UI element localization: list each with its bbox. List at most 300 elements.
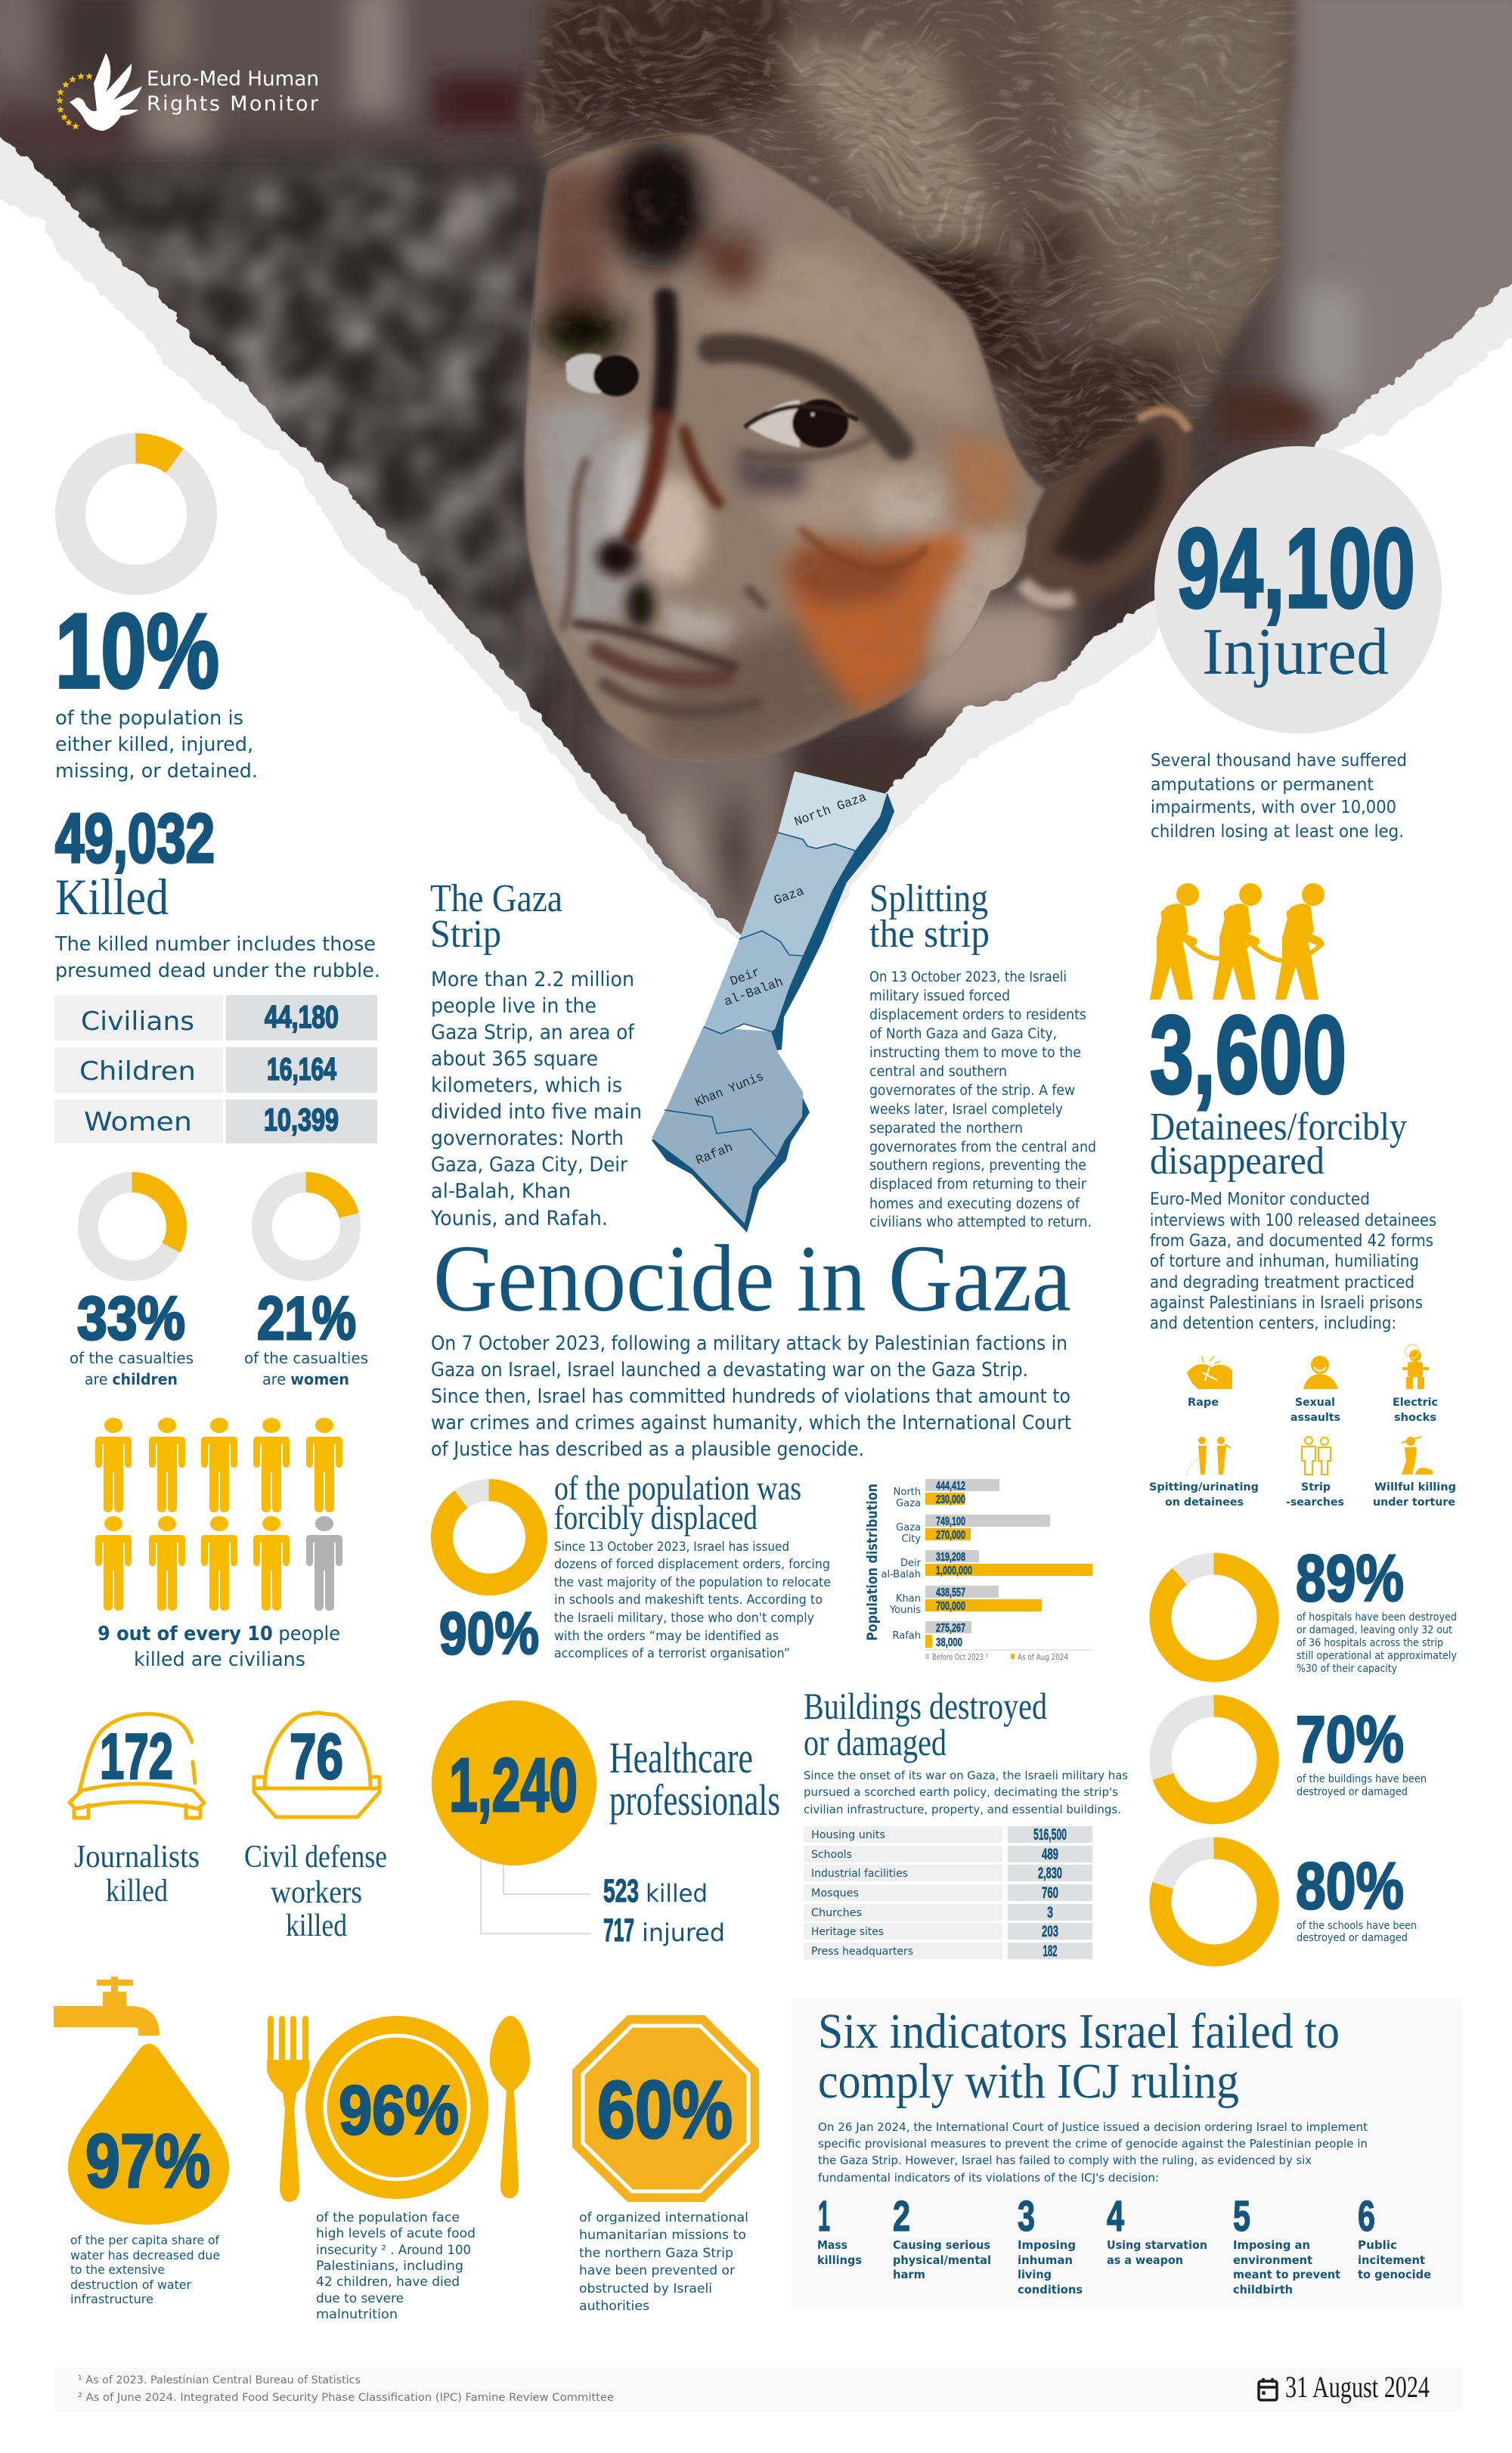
- bar values: 438,557: [936, 1586, 965, 1599]
- heading: [1150, 1106, 1407, 1183]
- body: the Israeli military, those who don't comply: [554, 1611, 814, 1625]
- indicator 4: Using starvation: [1107, 2238, 1207, 2252]
- text: population description: missing, or detained.: [55, 760, 258, 783]
- stat: 76: 76: [290, 1721, 343, 1793]
- icon: rape: [1187, 1357, 1232, 1389]
- body: displaced from returning to their: [869, 1177, 1086, 1192]
- text: missions: have been prevented or: [579, 2263, 735, 2278]
- icon: hard hat: [254, 1713, 380, 1817]
- heading: of the population was: [554, 1468, 801, 1507]
- text: food: of the population face: [316, 2210, 460, 2225]
- background photo: injured child: [0, 0, 1512, 954]
- indicator 3: inhuman: [1018, 2253, 1073, 2267]
- region: Gaza: [739, 833, 855, 956]
- text: journalists killed: killed: [106, 1874, 168, 1909]
- category labels: Younis: [889, 1605, 921, 1616]
- body: homes and executing dozens of: [869, 1196, 1080, 1212]
- indicator 6: incitement: [1358, 2253, 1426, 2267]
- icon: willful killing: [1402, 1437, 1433, 1475]
- text: hospitals: of 36 hospitals across the strip: [1297, 1637, 1443, 1649]
- heading: [554, 1468, 801, 1537]
- circle: 94,100 injured: [1154, 446, 1442, 733]
- text: journalists killed: Journalists: [74, 1840, 200, 1875]
- icon: strip searches: [1302, 1437, 1331, 1475]
- table: buildings: Mosques: [811, 1887, 859, 1899]
- logo text: Rights Monitor: [147, 92, 319, 116]
- stat: 172: 172: [100, 1721, 173, 1793]
- map shadow: [764, 793, 894, 1051]
- panel: healthcare professionals: [432, 1701, 780, 1949]
- text: missions: humanitarian missions to: [579, 2228, 746, 2243]
- bar values: 700,000: [936, 1600, 965, 1613]
- label: spitting/urinating: on detainees: [1165, 1496, 1244, 1509]
- body: interviews with 100 released detainees: [1150, 1211, 1436, 1230]
- text: pictogram caption: [98, 1623, 340, 1671]
- icon: chained detainees: [1150, 883, 1325, 1000]
- text: water: water has decreased due: [70, 2248, 220, 2262]
- heading: [804, 1685, 1047, 1763]
- table: buildings: 760: [1042, 1884, 1058, 1902]
- intro paragraph: Since then, Israel has committed hundreds of violations that amount to: [431, 1385, 1070, 1408]
- indicator 2: [893, 2192, 991, 2281]
- label: willful killing: [1373, 1481, 1456, 1509]
- text: journalists killed: [74, 1840, 200, 1909]
- indicator 5: environment: [1233, 2253, 1313, 2267]
- legend: As of Aug 2024: [1018, 1652, 1068, 1662]
- circle: 1,240: [432, 1701, 596, 1865]
- region: North Gaza: [778, 771, 887, 851]
- donut chart: 70%: [1160, 1706, 1268, 1813]
- category labels: Gaza: [896, 1498, 921, 1509]
- category labels: Rafah: [892, 1630, 921, 1642]
- icon: spitting and urinating: [1187, 1437, 1231, 1475]
- logo text: Euro-Med Human: [147, 67, 319, 91]
- indicator 4: as a weapon: [1107, 2253, 1183, 2267]
- text: hospitals: of hospitals have been destroyed: [1297, 1611, 1457, 1623]
- text: missions: of organized international: [579, 2210, 748, 2225]
- stat: 80%: 80%: [1296, 1850, 1404, 1923]
- body: about 365 square: [431, 1047, 598, 1071]
- body: governorates of the strip. A few: [869, 1083, 1075, 1099]
- body: On 13 October 2023, the Israeli: [869, 969, 1067, 985]
- icon: plate: [305, 2016, 488, 2199]
- label: sexual assaults: Sexual: [1295, 1397, 1335, 1409]
- label: strip searches: -searches: [1286, 1496, 1344, 1509]
- indicator 6: Public: [1358, 2238, 1397, 2252]
- body: accomplices of a terrorist organisation”: [554, 1646, 790, 1661]
- panel: six indicators: [792, 1999, 1462, 2307]
- heading: [430, 877, 562, 956]
- text: killed note: [54, 933, 380, 982]
- body: of torture and inhuman, humiliating: [1150, 1252, 1419, 1271]
- axis title: Population distribution: [864, 1484, 881, 1641]
- indicator 1: killings: [817, 2253, 862, 2267]
- indicator 6: [1358, 2192, 1431, 2281]
- ear: [1016, 408, 1193, 616]
- body: Since 13 October 2023, Israel has issued: [554, 1540, 789, 1554]
- body: [554, 1540, 831, 1661]
- table: killed breakdown: 44,180: [265, 999, 339, 1034]
- stat: 717 injured: injured: [642, 1918, 725, 1947]
- body: [818, 2120, 1368, 2185]
- body: Since the onset of its war on Gaza, the Israeli military has: [804, 1769, 1128, 1782]
- body: dozens of forced displacement orders, forcing: [554, 1557, 830, 1571]
- stat: 21%: 21%: [257, 1285, 356, 1353]
- heading: Splitting: [869, 877, 988, 920]
- heading: Healthcare: [609, 1733, 753, 1782]
- stat: 70%: 70%: [1296, 1703, 1404, 1776]
- text: civil defense: Civil defense: [244, 1840, 387, 1875]
- indicator 2: harm: [893, 2268, 925, 2281]
- indicator 5: meant to prevent: [1233, 2268, 1341, 2281]
- circle: 1,240: 1,240: [449, 1743, 578, 1828]
- body: On 26 Jan 2024, the International Court of Justice issued a decision ordering Israel to implement: [818, 2120, 1368, 2134]
- panel: forcibly displaced: [439, 1468, 831, 1667]
- body: governorates: North: [431, 1127, 624, 1150]
- indicator 5: Imposing an: [1233, 2238, 1310, 2252]
- label: electric shocks: shocks: [1394, 1412, 1436, 1424]
- table: killed breakdown: Women: [84, 1107, 192, 1137]
- label: electric shocks: [1393, 1397, 1438, 1424]
- panel: injured: [1151, 446, 1442, 842]
- region: Deir al-Balah: [704, 931, 803, 1034]
- map labels: al-Balah: [723, 975, 785, 1010]
- body: the vast majority of the population to relocate: [554, 1575, 831, 1589]
- map labels: Gaza: [773, 885, 806, 909]
- table: buildings: Housing units: [811, 1829, 885, 1841]
- stat: 523 killed: 523: [603, 1873, 639, 1909]
- text: women caption: are women: [262, 1370, 349, 1388]
- stat: 90%: 90%: [439, 1599, 539, 1667]
- indicator 2: physical/mental: [893, 2253, 991, 2267]
- map labels: Rafah: [694, 1141, 736, 1169]
- label: sexual assaults: assaults: [1290, 1412, 1340, 1424]
- body: of North Gaza and Gaza City,: [869, 1026, 1057, 1042]
- panel: killed: [54, 800, 380, 1143]
- category labels: Deir: [900, 1558, 922, 1569]
- table: buildings: 182: [1043, 1943, 1057, 1960]
- donut chart: 21%: [262, 1183, 351, 1270]
- text: children caption: are children: [85, 1370, 178, 1388]
- text: food: due to severe: [316, 2291, 404, 2306]
- text: injured description: [1151, 751, 1407, 842]
- body: Gaza, Gaza City, Deir: [431, 1153, 628, 1177]
- face: [525, 135, 1045, 760]
- table: buildings: 203: [1042, 1923, 1058, 1940]
- text: schools: destroyed or damaged: [1297, 1932, 1408, 1944]
- indicator 1: 1: [818, 2192, 830, 2241]
- heading: Strip: [430, 913, 501, 956]
- map labels: [693, 791, 869, 1169]
- label: strip searches: Strip: [1301, 1481, 1331, 1493]
- icon: stop sign: [572, 2015, 759, 2202]
- table: killed breakdown: Civilians: [81, 1006, 194, 1037]
- heading: disappeared: [1150, 1140, 1325, 1183]
- heading: comply with ICJ ruling: [818, 2054, 1239, 2109]
- body: people live in the: [431, 994, 596, 1018]
- category labels: Gaza: [896, 1522, 921, 1534]
- stat: 717 injured: [603, 1912, 725, 1949]
- heading: forcibly displaced: [554, 1498, 758, 1537]
- bar values: 270,000: [936, 1529, 965, 1542]
- text: water: to the extensive: [70, 2262, 165, 2277]
- text: water: destruction of water: [70, 2278, 191, 2292]
- bar values: 1,000,000: [936, 1565, 972, 1577]
- text: injured description: amputations or permanent: [1151, 775, 1374, 795]
- text: missions: authorities: [579, 2299, 649, 2314]
- body: [1150, 1190, 1436, 1333]
- bar values: 230,000: [936, 1493, 965, 1506]
- text: killed note: The killed number includes those: [54, 933, 376, 956]
- table: buildings: Heritage sites: [811, 1926, 884, 1938]
- text: pictogram caption: 9 out of every 10 people: [98, 1623, 340, 1645]
- category labels: Khan: [896, 1593, 921, 1605]
- title: Genocide in Gaza: [433, 1226, 1071, 1332]
- body: [430, 968, 642, 1230]
- stat: 97%: 97%: [85, 2119, 210, 2203]
- panel: children and women casualties: [70, 1183, 368, 1388]
- text: food: [316, 2210, 476, 2321]
- table: buildings: 3: [1047, 1904, 1053, 1921]
- text: hospitals: or damaged, leaving only 32 out: [1297, 1624, 1452, 1636]
- logo: Euro-Med Human Rights Monitor: [56, 53, 319, 131]
- panel: 10% of population: [55, 448, 258, 783]
- label: willful killing: Willful killing: [1374, 1481, 1456, 1493]
- connector lines: [481, 1845, 590, 1934]
- icon: fork: [267, 2019, 309, 2202]
- indicator 4: [1107, 2192, 1207, 2267]
- text: buildings: destroyed or damaged: [1297, 1786, 1408, 1798]
- stat: 89%: 89%: [1296, 1542, 1404, 1615]
- table: buildings: 489: [1042, 1846, 1058, 1863]
- indicator 1: Mass: [817, 2238, 847, 2252]
- body: fundamental indicators of its violations of the ICJ's decision:: [818, 2171, 1159, 2185]
- body: weeks later, Israel completely: [869, 1102, 1063, 1118]
- indicator 6: 6: [1358, 2192, 1375, 2241]
- heading: the strip: [869, 913, 990, 956]
- panel: water: [54, 1977, 229, 2306]
- text: injured description: children losing at least one leg.: [1151, 822, 1404, 842]
- panel: journalists killed: [70, 1714, 204, 1909]
- donut chart: 89%: [1160, 1564, 1268, 1671]
- text: children caption: [70, 1349, 194, 1388]
- label: spitting/urinating: [1149, 1481, 1259, 1509]
- body: civilian infrastructure, property, and essential buildings.: [804, 1803, 1121, 1816]
- stat: 10%: 10%: [55, 591, 219, 710]
- donut chart: 10%: [70, 448, 202, 580]
- text: water: infrastructure: [70, 2292, 153, 2306]
- intro paragraph: war crimes and crimes against humanity, which the International Court: [431, 1412, 1071, 1434]
- table: buildings: Press headquarters: [811, 1946, 913, 1958]
- indicator 5: childbirth: [1233, 2283, 1293, 2296]
- heading: professionals: [609, 1775, 780, 1825]
- map labels: North Gaza: [793, 791, 869, 830]
- text: food: malnutrition: [316, 2307, 398, 2321]
- footnotes: ¹ As of 2023. Palestinian Central Bureau of Statistics: [78, 2374, 361, 2386]
- body: specific provisional measures to prevent the crime of genocide against the Palestinian people in: [818, 2137, 1368, 2151]
- icon: water tap: [54, 1977, 160, 2036]
- stat: 33%: 33%: [77, 1285, 185, 1353]
- stat: 3,600: 3,600: [1150, 993, 1346, 1116]
- body: with the orders “may be identified as: [554, 1629, 779, 1643]
- body: Younis, and Rafah.: [430, 1207, 608, 1230]
- text: food: 42 children, have died: [316, 2275, 460, 2289]
- footnotes: [78, 2374, 614, 2404]
- donut chart: 80%: [1160, 1848, 1268, 1955]
- indicator 2: 2: [893, 2192, 910, 2241]
- donut chart: 90%: [442, 1490, 537, 1585]
- legend: Before Oct 2023 ¹: [932, 1652, 988, 1662]
- text: population description: either killed, injured,: [55, 733, 253, 756]
- indicator 5: [1233, 2192, 1341, 2296]
- heading: Six indicators Israel failed to: [818, 2004, 1340, 2059]
- body: pursued a scorched earth policy, decimating the strip's: [804, 1785, 1118, 1799]
- text: women caption: [244, 1349, 368, 1388]
- body: against Palestinians in Israeli prisons: [1150, 1294, 1423, 1313]
- indicator 5: 5: [1233, 2192, 1250, 2241]
- category labels: [881, 1487, 922, 1642]
- panel: food insecurity: [267, 2016, 530, 2321]
- table: buildings: 516,500: [1033, 1826, 1067, 1844]
- panel: buildings destroyed: [804, 1685, 1128, 1960]
- icon: press helmet: [70, 1714, 204, 1818]
- table: killed breakdown: [54, 995, 377, 1143]
- body: and detention centers, including:: [1150, 1314, 1396, 1333]
- date: 31 August 2024: [1285, 2370, 1430, 2404]
- text: population description: of the population is: [55, 707, 243, 730]
- text: missions: the northern Gaza Strip: [579, 2246, 733, 2261]
- indicator 3: 3: [1018, 2192, 1035, 2241]
- stat: 49,032: 49,032: [55, 800, 215, 877]
- stat: 60%: 60%: [597, 2064, 733, 2155]
- text: buildings: [1297, 1773, 1427, 1798]
- label: rape: Rape: [1188, 1397, 1219, 1409]
- body: and degrading treatment practiced: [1150, 1273, 1414, 1292]
- panel: humanitarian missions: [572, 2015, 759, 2314]
- indicator 3: [1018, 2192, 1083, 2296]
- text: food: insecurity ² . Around 100: [316, 2243, 471, 2257]
- body: military issued forced: [869, 988, 1010, 1004]
- icon: water drop: [68, 2044, 229, 2225]
- body: Gaza Strip, an area of: [431, 1021, 635, 1044]
- text: food: Palestinians, including: [316, 2259, 463, 2273]
- text: water: [70, 2233, 220, 2306]
- stat: 523 killed: killed: [646, 1879, 708, 1908]
- text: civil defense: [244, 1840, 387, 1943]
- circle: 94,100 injured: Injured: [1202, 616, 1389, 689]
- bar values: 319,208: [936, 1551, 965, 1564]
- text: pictogram caption: killed are civilians: [134, 1648, 305, 1671]
- body: separated the northern: [869, 1121, 1023, 1137]
- bar values: 444,412: [936, 1480, 965, 1493]
- label: sexual assaults: [1290, 1397, 1340, 1424]
- table: buildings: Industrial facilities: [811, 1868, 908, 1880]
- table: buildings: [804, 1826, 1092, 1960]
- text: schools: of the schools have been: [1297, 1920, 1417, 1932]
- bar values: 749,100: [936, 1515, 965, 1528]
- table: buildings: Schools: [811, 1849, 852, 1861]
- text: injured description: Several thousand have suffered: [1151, 751, 1407, 771]
- donut chart: 33%: [88, 1183, 177, 1270]
- body: in schools and makeshift tents. According to: [554, 1592, 823, 1607]
- heading: Buildings destroyed: [804, 1685, 1047, 1727]
- bars: [925, 1479, 1092, 1650]
- text block: splitting the strip: [869, 877, 1096, 1230]
- heading: or damaged: [804, 1721, 947, 1763]
- body: divided into five main: [431, 1100, 642, 1124]
- icon: sexual assaults: [1303, 1356, 1338, 1389]
- indicator 2: Causing serious: [893, 2238, 990, 2252]
- label: strip searches: [1286, 1481, 1344, 1509]
- heading: The Gaza: [430, 877, 562, 920]
- text: schools: [1297, 1920, 1417, 1944]
- bar values: 38,000: [936, 1636, 962, 1649]
- panel: hospitals, buildings and schools percentages: [1160, 1542, 1457, 1955]
- footnotes: ² As of June 2024. Integrated Food Security Phase Classification (IPC) Famine Review Committee: [78, 2392, 614, 2404]
- text: water: of the per capita share of: [70, 2233, 219, 2247]
- legend: [925, 1652, 1068, 1662]
- label: spitting/urinating: Spitting/urinating: [1149, 1481, 1259, 1493]
- logo text: [147, 67, 319, 116]
- text block: the Gaza Strip: [430, 877, 642, 1230]
- body: [869, 969, 1096, 1230]
- heading: Detainees/forcibly: [1150, 1106, 1407, 1149]
- body: Euro-Med Monitor conducted: [1150, 1190, 1370, 1209]
- label: willful killing: under torture: [1373, 1496, 1455, 1509]
- indicator 3: Imposing: [1018, 2238, 1076, 2252]
- table: buildings: Churches: [811, 1907, 862, 1919]
- indicator 4: 4: [1107, 2192, 1124, 2241]
- pictogram: 9 of 10 killed are civilians: [95, 1418, 342, 1671]
- body: governorates from the central and: [869, 1140, 1096, 1155]
- heading: [609, 1733, 780, 1825]
- heading: [869, 877, 990, 956]
- body: instructing them to move to the: [869, 1045, 1081, 1061]
- bar values: 275,267: [936, 1622, 965, 1635]
- table: killed breakdown: 10,399: [264, 1102, 339, 1137]
- heading: Killed: Killed: [55, 868, 169, 926]
- intro paragraph: On 7 October 2023, following a military attack by Palestinian factions in: [431, 1332, 1067, 1355]
- panel: civil defense workers killed: [244, 1713, 387, 1943]
- region: Rafah and Khan Yunis: [652, 1027, 803, 1223]
- text: civil defense: killed: [286, 1909, 347, 1943]
- text: missions: obstructed by Israeli: [579, 2281, 712, 2296]
- table: killed breakdown: Children: [79, 1056, 196, 1087]
- table: buildings: 2,830: [1038, 1865, 1062, 1882]
- body: the Gaza Strip. However, Israel has failed to comply with the ruling, as evidenced by six: [818, 2154, 1312, 2167]
- text: hospitals: [1297, 1611, 1457, 1675]
- intro paragraph: Gaza on Israel, Israel launched a devastating war on the Gaza Strip.: [431, 1359, 1028, 1382]
- category labels: North: [894, 1487, 921, 1498]
- icon: electric shocks: [1402, 1344, 1429, 1389]
- text: buildings: of the buildings have been: [1297, 1773, 1427, 1785]
- map labels: Khan Yunis: [693, 1070, 766, 1111]
- bar values: [936, 1480, 972, 1649]
- text: hospitals: %30 of their capacity: [1297, 1663, 1397, 1675]
- body: More than 2.2 million: [431, 968, 634, 991]
- body: displacement orders to residents: [869, 1007, 1086, 1023]
- stat: 717 injured: 717: [603, 1912, 634, 1949]
- text: population description: [55, 707, 258, 783]
- icon: spoon: [490, 2016, 530, 2198]
- map: Gaza Strip governorates: [652, 771, 894, 1233]
- indicator 6: to genocide: [1358, 2268, 1431, 2281]
- text: children caption: of the casualties: [70, 1349, 194, 1367]
- text: women caption: of the casualties: [244, 1349, 368, 1367]
- stat: 96%: 96%: [339, 2072, 459, 2149]
- indicator 3: conditions: [1018, 2283, 1083, 2296]
- body: kilometers, which is: [431, 1074, 622, 1097]
